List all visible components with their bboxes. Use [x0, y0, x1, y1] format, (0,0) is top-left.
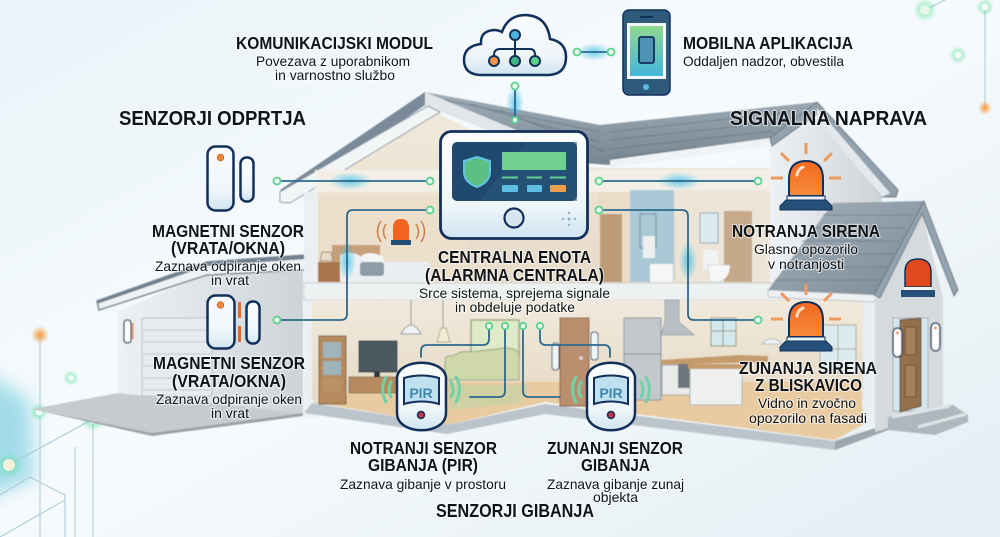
label: magnetic sensor upper: (VRATA/OKNA)	[171, 238, 285, 258]
interior door and small sensors	[552, 318, 598, 406]
label: communication module: in varnostno službo	[275, 67, 395, 83]
label: mobile app: MOBILNA APLIKACIJA	[683, 33, 853, 53]
label: indoor siren: Glasno opozorilo	[754, 241, 858, 257]
heading: signalling device: SIGNALNA NAPRAVA	[730, 108, 927, 130]
icon: facade siren	[901, 259, 935, 297]
label: magnetic sensor lower: in vrat	[211, 405, 249, 421]
upper floor rooms	[304, 170, 770, 417]
bed	[318, 245, 430, 282]
garage	[32, 255, 305, 436]
icon: exterior siren	[771, 284, 841, 351]
label: communication module: KOMUNIKACIJSKI MODUL	[236, 33, 433, 53]
icon: central alarm unit	[440, 132, 588, 238]
small bedroom siren	[378, 219, 424, 245]
label: indoor motion sensor: Zaznava gibanje v prostoru	[340, 476, 506, 492]
label: outdoor siren: ZUNANJA SIRENA	[739, 358, 877, 378]
label: communication module	[236, 33, 433, 83]
label: outdoor motion sensor: GIBANJA	[581, 455, 650, 475]
icon: PIR sensor left: PIR	[409, 385, 433, 401]
label: outdoor siren: Vidno in zvočno	[758, 395, 856, 411]
icon: magnetic sensor upper	[208, 146, 254, 210]
lower floor rooms	[304, 300, 888, 450]
label: outdoor motion sensor: Zaznava gibanje zunaj	[547, 476, 684, 492]
decorative circuit upper right	[913, 0, 994, 115]
icon: interior siren	[771, 143, 841, 210]
label: indoor siren: v notranjosti	[768, 256, 844, 272]
label: central unit: (ALARMNA CENTRALA)	[425, 265, 604, 285]
garden-side house	[768, 201, 958, 432]
label: mobile app: Oddaljen nadzor, obvestila	[683, 53, 844, 69]
label: magnetic sensor lower: Zaznava odpiranje oken	[156, 391, 302, 407]
icon: magnetic sensor lower	[208, 296, 260, 348]
floor slab	[304, 283, 800, 300]
label: mobile app	[683, 33, 853, 69]
heading: opening sensors: SENZORJI ODPRTJA	[119, 108, 306, 130]
icon: PIR sensor left	[382, 363, 460, 430]
bookshelf	[319, 336, 346, 404]
label: indoor motion sensor: GIBANJA (PIR)	[368, 455, 478, 475]
sofa and window	[445, 320, 530, 410]
door sensors	[893, 323, 940, 357]
icon: PIR sensor right: PIR	[599, 385, 623, 401]
label: indoor motion sensor: NOTRANJI SENZOR	[350, 438, 497, 458]
label: central unit: in obdeluje podatke	[455, 299, 575, 315]
label: magnetic sensor upper: Zaznava odpiranje oken	[155, 258, 301, 274]
tv and cabinet	[349, 341, 397, 393]
label: magnetic sensor lower: MAGNETNI SENZOR	[153, 353, 305, 373]
bathroom	[600, 211, 752, 282]
label: central unit: Srce sistema, sprejema signale	[419, 285, 610, 301]
label: magnetic sensor lower: (VRATA/OKNA)	[172, 371, 286, 391]
label: magnetic sensor upper: MAGNETNI SENZOR	[152, 221, 304, 241]
label: outdoor siren: Z BLISKAVICO	[755, 375, 862, 395]
label: outdoor siren: opozorilo na fasadi	[749, 410, 867, 426]
label: magnetic sensor lower	[153, 353, 305, 421]
label: indoor siren	[732, 221, 880, 272]
label: outdoor motion sensor: objekta	[593, 489, 638, 505]
label: communication module: Povezava z uporabnikom	[256, 53, 410, 69]
icon: PIR sensor right	[572, 363, 650, 430]
front door	[893, 318, 928, 412]
main gable wall	[280, 92, 770, 290]
kitchen	[624, 300, 856, 405]
label: indoor siren: NOTRANJA SIRENA	[732, 221, 880, 241]
label: magnetic sensor upper: in vrat	[211, 272, 249, 288]
upper right gable	[770, 102, 898, 290]
label: central unit: CENTRALNA ENOTA	[438, 247, 591, 267]
icon: cloud communication module	[464, 15, 566, 75]
entrance stairs	[888, 405, 968, 435]
label: indoor motion sensor	[340, 438, 506, 492]
house illustration	[32, 92, 968, 450]
label: outdoor motion sensor: ZUNANJI SENZOR	[547, 438, 683, 458]
decorative circuit lower left	[0, 326, 106, 537]
label: central unit	[419, 247, 610, 315]
label: outdoor siren	[739, 358, 877, 426]
label: magnetic sensor upper	[152, 221, 304, 288]
heading: motion sensors: SENZORJI GIBANJA	[436, 500, 594, 521]
pendant lamps	[401, 300, 450, 342]
label: outdoor motion sensor	[547, 438, 684, 505]
main back roof	[425, 92, 817, 168]
connector lines	[274, 43, 762, 397]
icon: mobile phone	[623, 10, 670, 95]
